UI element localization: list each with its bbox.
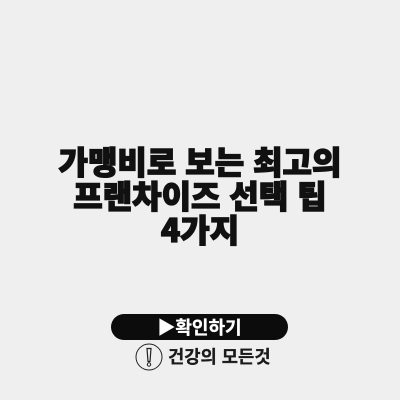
title: 가맹비로 보는 최고의 — [59, 138, 341, 184]
icon: exclamation circle — [136, 344, 162, 370]
button: confirm: ▶확인하기 — [157, 314, 242, 340]
title: 4가지 — [161, 206, 239, 252]
brand name: 건강의 모든것 — [168, 343, 271, 369]
brand row — [136, 343, 271, 370]
title — [58, 138, 341, 252]
title: 프랜차이즈 선택 팁 — [73, 172, 327, 218]
button: confirm — [111, 314, 288, 340]
